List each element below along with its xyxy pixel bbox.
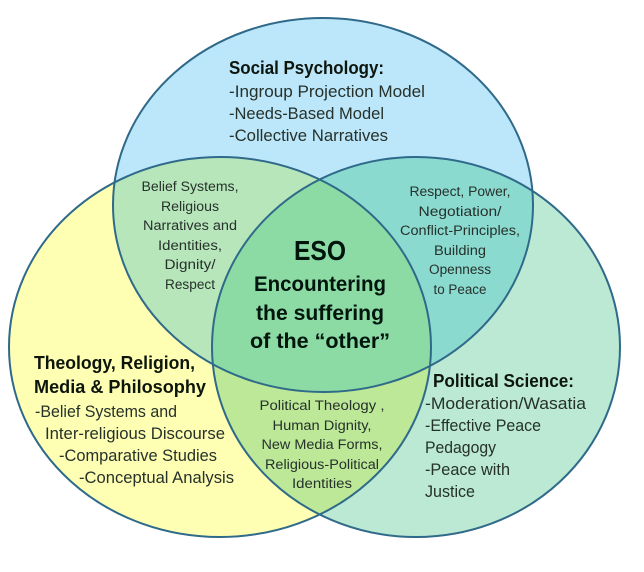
text block: respect and power overlap [400,184,520,298]
text block: center ESO: ESO [294,235,346,266]
text block: political theology overlap: Identities [292,476,352,492]
text block: social psychology: -Ingroup Projection Model [229,82,425,101]
text block: theology, religion, media and philosophy: -Comparative Studies [59,446,217,465]
text block: theology, religion, media and philosophy [34,352,234,487]
text block: political theology overlap: Political Theology , [260,398,384,414]
text block: political theology overlap: Religious-Political [265,457,379,473]
text block: belief systems overlap: Religious [161,199,219,215]
text block: theology, religion, media and philosophy: Media & Philosophy [34,376,207,397]
overlap: social psychology and political science [322,158,532,364]
text block: political science: Political Science: [433,370,574,391]
text block: belief systems overlap: Belief Systems, [142,179,238,195]
text block: political theology overlap: New Media Forms, [262,437,382,453]
overlap: social psychology and theology [114,158,318,362]
text block: respect and power overlap: Building [434,243,486,259]
text block: political science: -Peace with [425,460,510,479]
circle: social psychology [113,18,533,392]
text block: center ESO: of the “other” [250,330,390,353]
text block: social psychology [229,57,425,145]
text block: belief systems overlap: Dignity/ [164,257,216,273]
text block: center ESO: Encountering [254,273,386,296]
text block: respect and power overlap: Respect, Power, [410,184,510,200]
circle: theology, religion, media and philosophy [9,157,431,537]
text block: center ESO: the suffering [256,302,384,325]
overlap: theology and political science [214,366,429,514]
text block: belief systems overlap: Narratives and [143,218,237,234]
text block: political science: -Effective Peace [425,416,541,435]
circle: political science [212,157,620,537]
text block: belief systems overlap: Respect [165,277,215,293]
text block: political science: Pedagogy [425,438,496,457]
text block: theology, religion, media and philosophy: Inter-religious Discourse [45,424,225,443]
text block: social psychology: Social Psychology: [229,57,384,78]
text block: theology, religion, media and philosophy: -Belief Systems and [35,402,177,421]
text block: respect and power overlap: Conflict-Principles, [400,223,520,239]
text block: social psychology: -Collective Narratives [229,126,388,145]
text block: center ESO [250,235,390,353]
text block: respect and power overlap: Negotiation/ [418,204,502,220]
text block: political science [425,370,587,501]
text block: political theology overlap [260,398,384,492]
text block: belief systems overlap [142,179,238,293]
overlap: center ESO [213,180,430,391]
text block: belief systems overlap: Identities, [158,238,222,254]
text block: political science: -Moderation/Wasatia [425,394,587,413]
text block: political theology overlap: Human Dignity, [272,418,372,434]
text block: theology, religion, media and philosophy: -Conceptual Analysis [79,468,234,487]
text block: respect and power overlap: Openness [429,262,491,278]
text block: respect and power overlap: to Peace [434,282,487,298]
text block: theology, religion, media and philosophy: Theology, Religion, [34,352,195,373]
text block: social psychology: -Needs-Based Model [229,104,384,123]
text block: political science: Justice [425,482,475,501]
